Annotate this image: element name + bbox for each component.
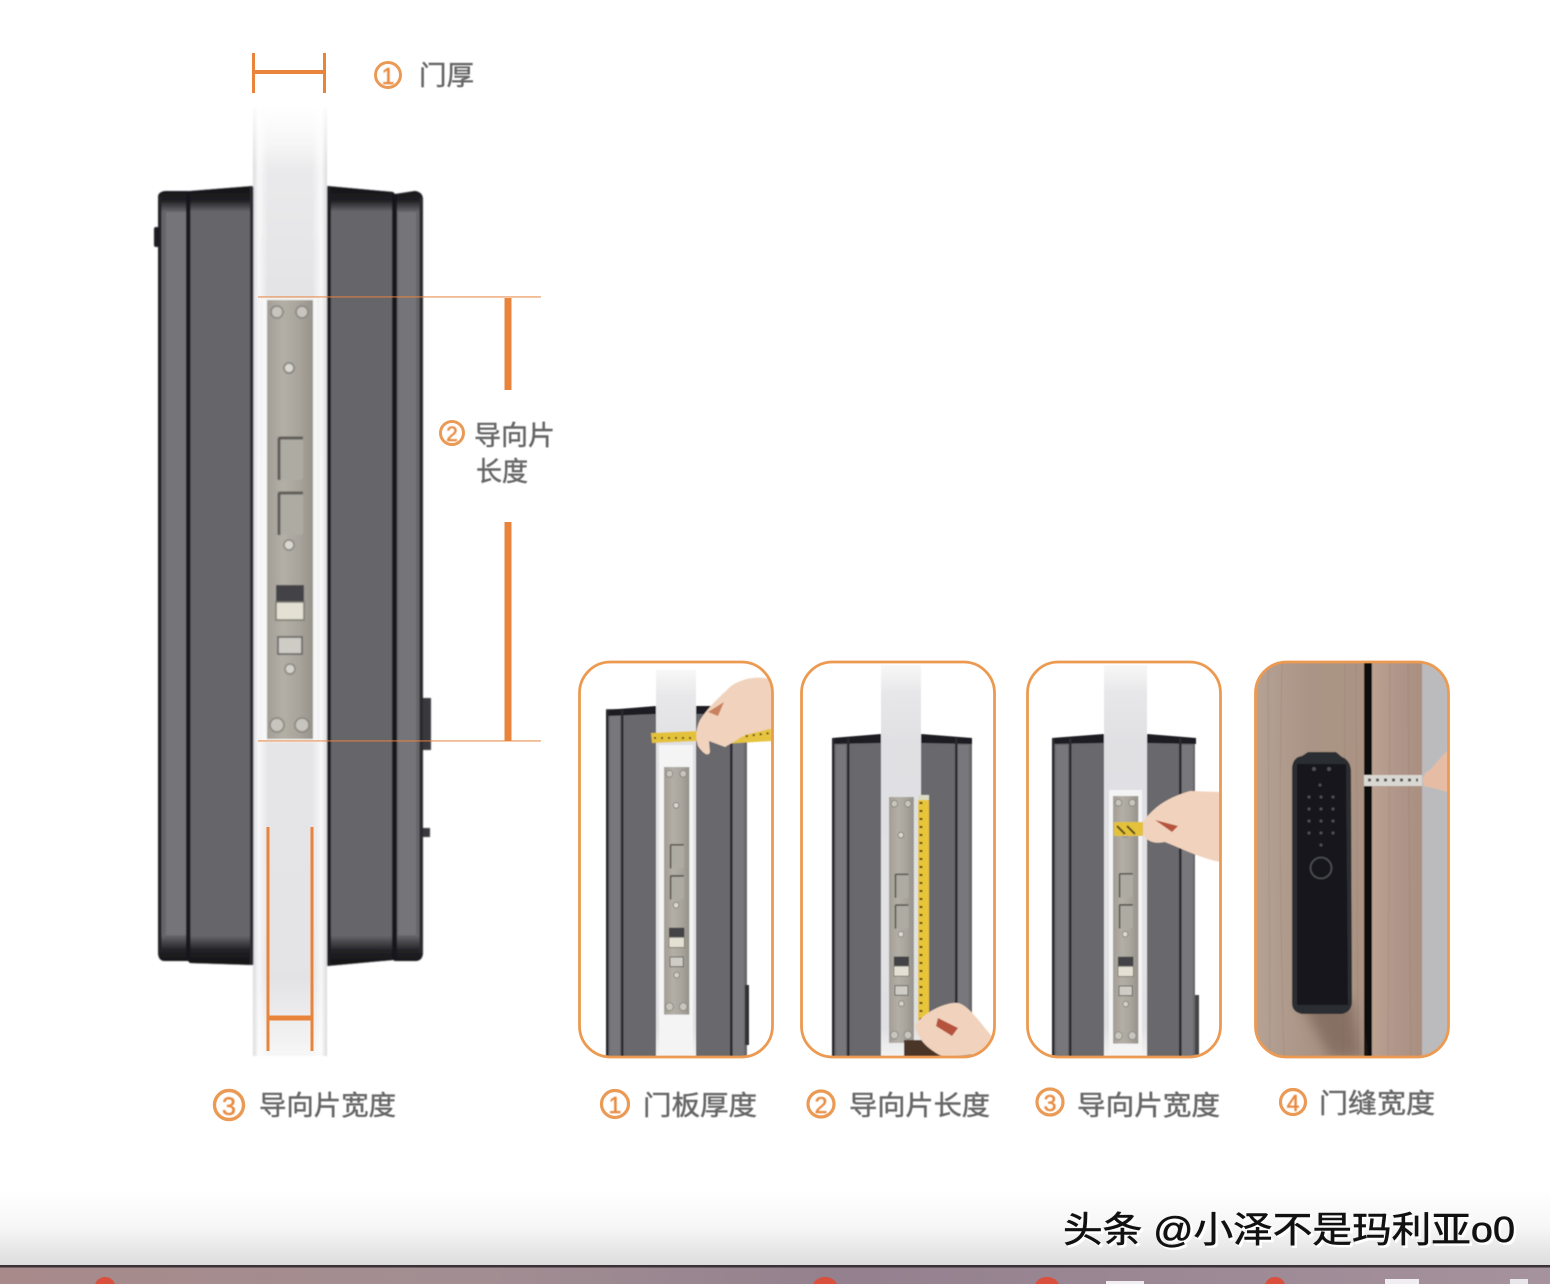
right side handle tabs bbox=[423, 698, 431, 837]
label: guide plate length bbox=[440, 421, 555, 487]
label: door thickness bbox=[376, 61, 474, 91]
label: panel 3: 3 bbox=[1044, 1090, 1056, 1116]
label: panel 4: 门缝宽度 bbox=[1319, 1089, 1435, 1119]
label: door thickness: 门厚 bbox=[419, 61, 474, 91]
hand bbox=[696, 678, 773, 754]
label: panel 2: 2 bbox=[815, 1092, 827, 1118]
label: panel 3 bbox=[1037, 1089, 1220, 1121]
left side button bbox=[154, 227, 159, 247]
wood door bbox=[1256, 662, 1364, 1058]
measuring tape bbox=[651, 731, 698, 743]
door gap bbox=[1364, 662, 1372, 1058]
hand bbox=[1143, 791, 1221, 862]
label: guide plate length: 导向片 bbox=[474, 421, 555, 451]
footer gradient bbox=[0, 1190, 1550, 1266]
label: panel 4 bbox=[1280, 1089, 1435, 1119]
lock shadow bbox=[1300, 1000, 1362, 1058]
watermark: 头条 @小泽不是玛利亚o0 bbox=[1063, 1209, 1515, 1250]
panel 4: door gap measurement bbox=[1256, 662, 1450, 1058]
ruler bbox=[1364, 775, 1422, 786]
main lock diagram bbox=[154, 108, 431, 1056]
label: panel 1: 门板厚度 bbox=[643, 1091, 757, 1121]
panel 1: door thickness measurement bbox=[580, 662, 773, 1060]
label: door thickness: 1 bbox=[382, 63, 394, 89]
panel 2: guide plate length measurement bbox=[802, 662, 995, 1060]
left lock body bbox=[158, 186, 254, 965]
door slab bbox=[253, 108, 327, 1056]
fingerprint reader bbox=[1310, 858, 1332, 878]
watermark: 头条 @小泽不是玛利亚o0 bbox=[1065, 1211, 1517, 1252]
label: guide plate width: 导向片宽度 bbox=[259, 1091, 396, 1121]
measuring tape bbox=[918, 795, 929, 1030]
guide plate width dimension bbox=[266, 827, 314, 1051]
smart lock bbox=[1292, 752, 1352, 1014]
hand bbox=[1422, 751, 1447, 792]
door thickness dimension bbox=[252, 53, 326, 93]
right lock body bbox=[327, 186, 423, 966]
door frame bbox=[1422, 662, 1450, 1058]
label: guide plate width: 3 bbox=[222, 1093, 236, 1121]
label: guide plate length: 2 bbox=[446, 423, 458, 446]
bottom bar bbox=[0, 1265, 1550, 1284]
panel 3: guide plate width measurement bbox=[1028, 662, 1221, 1060]
keypad bbox=[1308, 767, 1334, 846]
label: panel 1: 1 bbox=[609, 1092, 621, 1118]
guide plate length dimension bbox=[258, 296, 541, 742]
label: panel 3: 导向片宽度 bbox=[1077, 1091, 1220, 1121]
label: panel 4: 4 bbox=[1287, 1090, 1300, 1116]
hand bbox=[915, 1003, 995, 1058]
label: guide plate length: 长度 bbox=[476, 457, 528, 487]
label: panel 1 bbox=[602, 1090, 757, 1121]
measuring tape bbox=[1114, 822, 1143, 836]
label: panel 2: 导向片长度 bbox=[849, 1091, 990, 1121]
tape case bbox=[903, 1039, 941, 1056]
faceplate bbox=[262, 298, 317, 742]
